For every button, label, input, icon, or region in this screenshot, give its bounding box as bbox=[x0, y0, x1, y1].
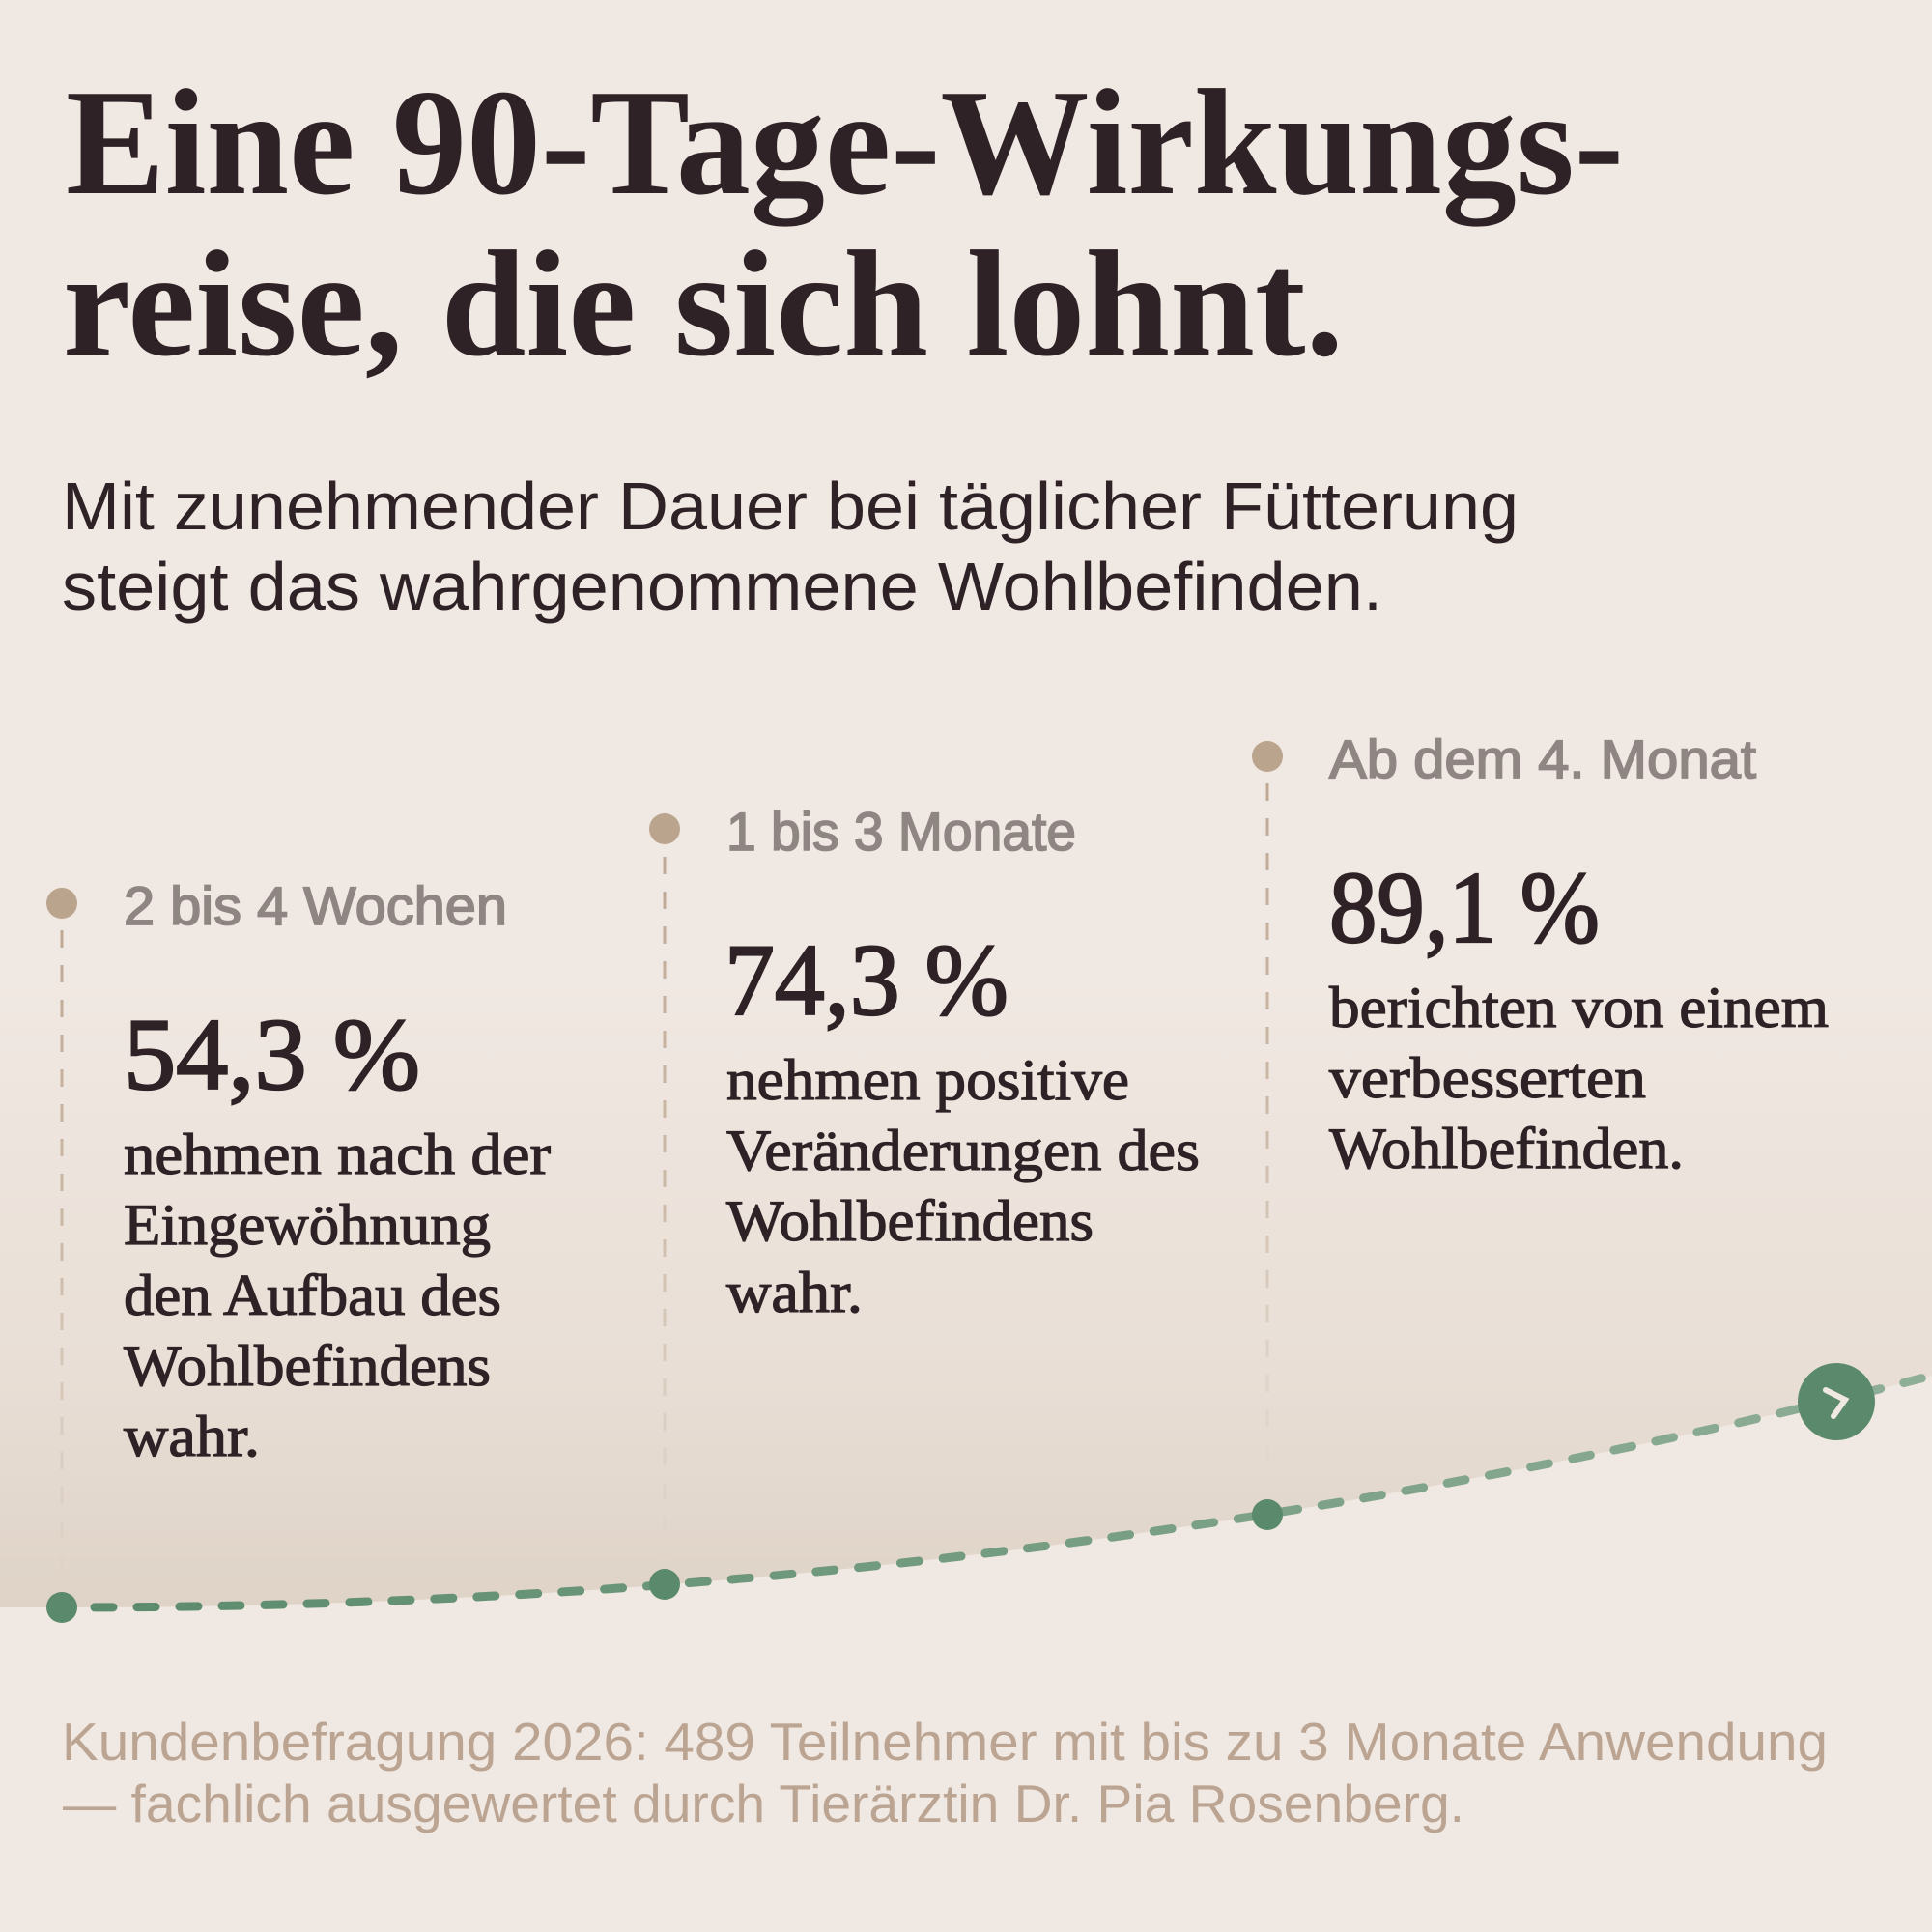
title: reise, die sich lohnt. bbox=[63, 219, 1344, 387]
panel: 2 bis 4 Wochen bbox=[46, 875, 551, 1584]
growth curve bbox=[62, 1376, 1932, 1607]
arrow badge bbox=[1798, 1363, 1875, 1440]
subtitle bbox=[62, 469, 1519, 624]
period label 2: 1 bis 3 Monate bbox=[726, 801, 1076, 862]
panel: Ab dem 4. Monat bbox=[1252, 728, 1829, 1488]
description 1: Eingewöhnung bbox=[124, 1193, 491, 1257]
title bbox=[63, 58, 1624, 387]
footnote: — fachlich ausgewertet durch Tierärztin Dr. Pia Rosenberg. bbox=[63, 1774, 1464, 1833]
period label 1: 2 bis 4 Wochen bbox=[124, 875, 507, 936]
curve point 2 bbox=[649, 1569, 680, 1600]
statistic 89,1 %: 89,1 % bbox=[1329, 851, 1600, 964]
description 2: nehmen positive bbox=[726, 1048, 1129, 1112]
statistic 74,3 %: 74,3 % bbox=[724, 923, 1009, 1037]
subtitle: steigt das wahrgenommene Wohlbefinden. bbox=[62, 549, 1382, 624]
period label 3: Ab dem 4. Monat bbox=[1329, 728, 1756, 789]
title: Eine 90-Tage-Wirkungs- bbox=[66, 58, 1624, 227]
footnote bbox=[62, 1712, 1828, 1833]
curve point 3 bbox=[1252, 1499, 1283, 1530]
timeline marker 1 bbox=[46, 888, 77, 919]
dashed connector 1 bbox=[60, 930, 64, 1584]
description 1: Wohlbefindens bbox=[124, 1334, 491, 1398]
timeline marker 2 bbox=[649, 813, 680, 844]
description 1 bbox=[124, 1122, 551, 1468]
subtitle: Mit zunehmender Dauer bei täglicher Fütterung bbox=[62, 469, 1519, 544]
description 1: nehmen nach der bbox=[124, 1122, 551, 1186]
description 2: wahr. bbox=[726, 1261, 863, 1324]
description 3: verbesserten bbox=[1329, 1046, 1646, 1110]
statistic 54,3 %: 54,3 % bbox=[124, 998, 420, 1111]
dashed connector 3 bbox=[1265, 783, 1269, 1488]
description 3: Wohlbefinden. bbox=[1329, 1117, 1684, 1180]
description 1: den Aufbau des bbox=[124, 1264, 501, 1327]
description 2: Wohlbefindens bbox=[726, 1189, 1094, 1253]
description 2: Veränderungen des bbox=[726, 1119, 1200, 1182]
area under curve bbox=[0, 966, 1932, 1607]
timeline marker 3 bbox=[1252, 741, 1283, 772]
curve point 1 bbox=[46, 1592, 77, 1623]
description 3: berichten von einem bbox=[1329, 976, 1829, 1039]
description 3 bbox=[1329, 976, 1829, 1180]
footnote: Kundenbefragung 2026: 489 Teilnehmer mit bis zu 3 Monate Anwendung bbox=[62, 1712, 1828, 1772]
description 2 bbox=[726, 1048, 1200, 1324]
panel: 1 bis 3 Monate bbox=[649, 801, 1200, 1555]
description 1: wahr. bbox=[124, 1405, 260, 1468]
dashed connector 2 bbox=[663, 857, 667, 1555]
